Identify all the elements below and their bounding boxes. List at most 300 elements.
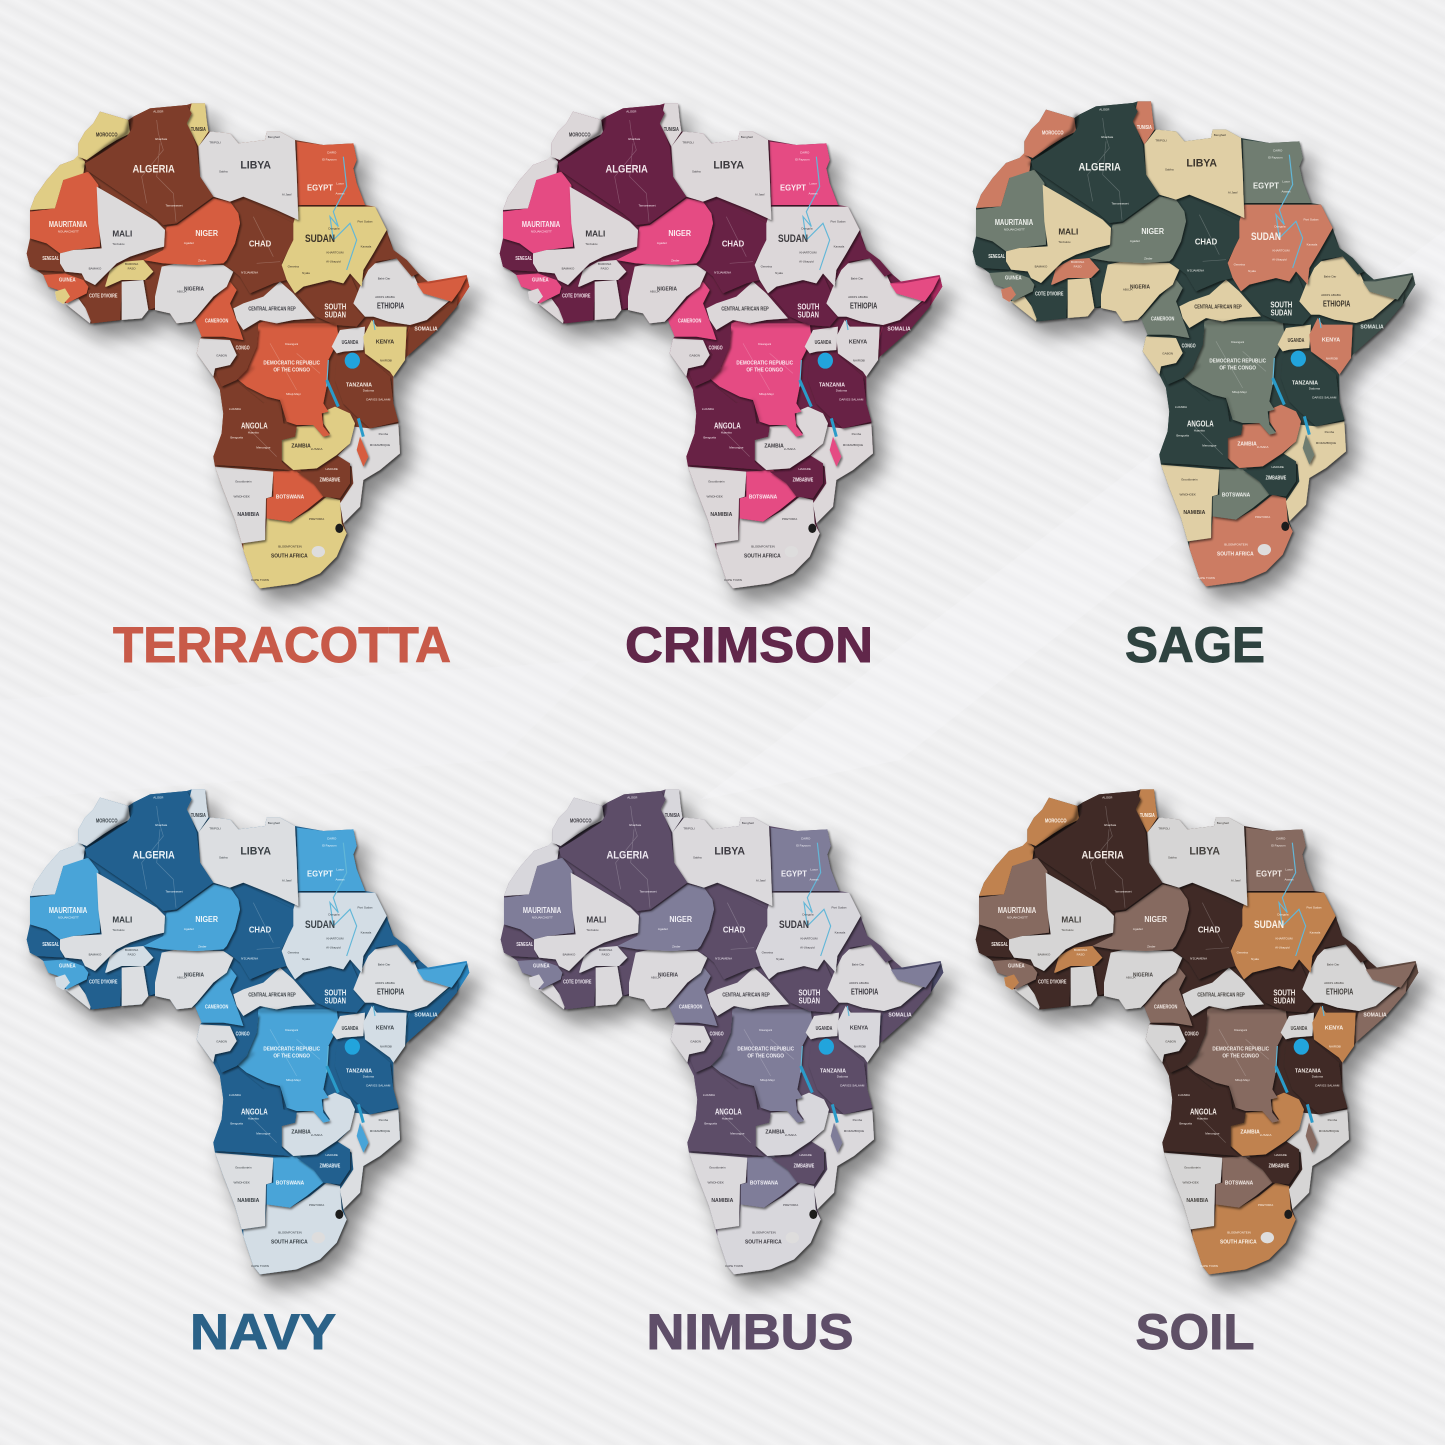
country labels: Geneina: [288, 264, 299, 268]
country labels: Benguela: [1179, 1121, 1192, 1125]
country labels: ANGOLA: [715, 1107, 742, 1116]
country labels: Tamanrasset: [165, 204, 183, 208]
country labels: SOUTH AFRICA: [744, 553, 781, 559]
country labels: N'DJAMENA: [715, 957, 732, 961]
country labels: MOROCCO: [96, 819, 117, 825]
country labels: Ghardaia: [1104, 823, 1116, 827]
country labels: ETHIOPIA: [851, 987, 878, 996]
country labels: Grootfontein: [1181, 478, 1198, 482]
country labels: CAMEROON: [1154, 1004, 1177, 1010]
country labels: SUDAN: [305, 233, 335, 245]
country labels: Pemba: [852, 432, 861, 436]
country labels: MOROCCO: [1042, 131, 1063, 137]
country labels: SENEGAL: [516, 942, 533, 948]
country labels: Al-Ubayyid: [1272, 258, 1287, 262]
country labels: El Fayoum: [322, 844, 337, 848]
country labels: Benghazi: [741, 135, 754, 139]
country labels: NOUAKCHOTT: [1004, 228, 1025, 232]
country labels: SOMALIA: [1360, 325, 1384, 331]
country shapes: [973, 101, 1415, 586]
country labels: MAURITANIA: [523, 906, 561, 915]
country labels: Benghazi: [268, 135, 281, 139]
country labels: Mbuji-Mayi: [286, 392, 301, 396]
country labels: SUDAN: [778, 233, 808, 245]
country labels: TRIPOLI: [209, 140, 221, 144]
country labels: Huambo: [1194, 428, 1205, 432]
country labels: ABUJA: [651, 976, 660, 980]
country labels: El Fayoum: [795, 158, 810, 162]
country labels: Zinder: [198, 945, 207, 949]
country labels: Ghardaia: [629, 823, 641, 827]
country labels: [42, 109, 438, 582]
country labels: Grootfontein: [1184, 1166, 1201, 1170]
country labels: ANGOLA: [1187, 419, 1214, 428]
country labels: BAMAKO: [562, 266, 575, 270]
country labels: MALI: [112, 230, 132, 239]
country labels: Luxor: [810, 867, 818, 871]
country labels: SUDAN: [1274, 996, 1295, 1005]
country labels: MALI: [586, 916, 606, 925]
country labels: DAR ES SALAAM: [366, 398, 391, 402]
country labels: TUNISIA: [191, 813, 206, 819]
country labels: Al Jawf: [756, 878, 766, 882]
country labels: Port Sudan: [358, 220, 373, 224]
country labels: Kisangani: [285, 342, 299, 346]
country labels: Grootfontein: [235, 480, 252, 484]
country shapes: [500, 103, 942, 588]
country labels: GABON: [1162, 352, 1173, 356]
country labels: ALGER: [627, 795, 638, 799]
country labels: CHAD: [722, 240, 744, 249]
country labels: Agadez: [657, 241, 668, 245]
country labels: Mbuji-Mayi: [286, 1078, 301, 1082]
country labels: TUNISIA: [664, 127, 679, 133]
country shapes: [27, 103, 469, 588]
country labels: ZAMBIA: [1240, 1130, 1260, 1136]
country labels: Dodoma: [363, 389, 374, 393]
country labels: HARARE: [1271, 465, 1284, 469]
country labels: SUDAN: [779, 919, 809, 931]
country labels: Dodoma: [837, 1075, 848, 1079]
country labels: UGANDA: [1291, 1026, 1307, 1032]
country labels: Geneina: [288, 950, 299, 954]
country labels: MOROCCO: [569, 133, 590, 139]
country labels: GUINEA: [1005, 276, 1022, 282]
country labels: CAMEROON: [205, 318, 228, 324]
country labels: KENYA: [1322, 337, 1340, 343]
country labels: BAMAKO: [89, 952, 102, 956]
country labels: SUDAN: [1271, 308, 1292, 317]
country labels: ZAMBIA: [291, 444, 311, 450]
country labels: SUDAN: [799, 996, 820, 1005]
country labels: Mbuji-Mayi: [760, 1078, 775, 1082]
title: terracotta: TERRACOTTA: [113, 617, 451, 673]
country labels: ALGERIA: [605, 164, 648, 176]
country labels: MOROCCO: [1045, 819, 1066, 825]
country labels: Benguela: [230, 1121, 243, 1125]
country labels: MAURITANIA: [995, 218, 1033, 227]
country labels: Ghardaia: [628, 137, 640, 141]
country labels: Menongue: [256, 1131, 271, 1135]
country labels: ALGERIA: [606, 850, 649, 862]
country labels: Port Sudan: [832, 906, 847, 910]
country labels: BOTSWANA: [276, 1181, 304, 1187]
country labels: PRETORIA: [782, 517, 797, 521]
country labels: WINDHOEK: [706, 494, 723, 498]
country labels: SOUTH AFRICA: [1217, 551, 1254, 557]
country labels: MOZAMBIQUE: [370, 1129, 390, 1133]
country labels: Menongue: [730, 1131, 745, 1135]
country labels: HARARE: [1274, 1153, 1287, 1157]
country labels: Al Jawf: [282, 878, 292, 882]
country labels: NAMIBIA: [710, 512, 732, 518]
country labels: Benguela: [703, 435, 716, 439]
country labels: CONGO: [236, 345, 250, 351]
country labels: DEMOCRATIC REPUBLIC: [737, 1047, 794, 1053]
country labels: NAIROBI: [1329, 1045, 1341, 1049]
country labels: GUINEA: [59, 964, 76, 970]
country labels: NOUAKCHOTT: [532, 916, 553, 920]
country labels: Geneina: [1237, 950, 1248, 954]
country labels: CHAD: [249, 240, 271, 249]
country labels: SOUTH: [798, 988, 821, 997]
country shapes: [976, 789, 1418, 1274]
country labels: Kassala: [1307, 243, 1318, 247]
country labels: SUDAN: [1254, 919, 1284, 931]
country labels: NAIROBI: [854, 1045, 866, 1049]
country labels: LIBYA: [713, 160, 744, 172]
country labels: ABUJA: [1126, 976, 1135, 980]
country labels: CHAD: [1195, 238, 1217, 247]
country labels: TANZANIA: [1295, 1068, 1321, 1074]
country labels: Kisangani: [285, 1028, 299, 1032]
country labels: Bahir Dar: [378, 276, 390, 280]
country labels: Aswan: [810, 877, 819, 881]
country labels: NAMIBIA: [1183, 510, 1205, 516]
country labels: LIBYA: [714, 846, 745, 858]
country labels: Luxor: [1285, 867, 1293, 871]
country labels: TANZANIA: [346, 382, 372, 388]
country labels: NIGERIA: [1130, 284, 1150, 290]
country labels: SENEGAL: [515, 256, 532, 262]
country labels: UGANDA: [342, 1026, 358, 1032]
country labels: DEMOCRATIC REPUBLIC: [263, 1047, 320, 1053]
country labels: UGANDA: [1288, 338, 1304, 344]
country labels: Al Jawf: [755, 192, 765, 196]
country labels: NAIROBI: [1326, 357, 1338, 361]
country labels: CENTRAL AFRICAN REP: [248, 306, 296, 312]
country labels: BOTSWANA: [1222, 493, 1250, 499]
country labels: Benguela: [704, 1121, 717, 1125]
country labels: Sabha: [693, 855, 702, 859]
country labels: Kassala: [834, 245, 845, 249]
country labels: ABUJA: [177, 976, 186, 980]
country labels: Timbuktu: [1058, 240, 1071, 244]
country labels: Tamanrasset: [639, 890, 657, 894]
country labels: FASO: [602, 952, 610, 956]
country labels: NAMIBIA: [237, 1198, 259, 1204]
country labels: Al Jawf: [282, 192, 292, 196]
country labels: NIGER: [1141, 227, 1164, 236]
country labels: MALI: [1061, 916, 1081, 925]
country labels: ADDIS ABABA: [1324, 981, 1344, 985]
country labels: SUDAN: [1251, 231, 1281, 243]
country labels: ZIMBABWE: [1269, 1164, 1290, 1170]
country labels: NIGER: [668, 229, 691, 238]
country labels: BAMAKO: [89, 266, 102, 270]
country labels: Ghardaia: [155, 823, 167, 827]
country labels: LUSAKA: [1257, 445, 1269, 449]
country labels: LUANDA: [1175, 405, 1187, 409]
country labels: Huambo: [722, 1116, 733, 1120]
country labels: Huambo: [1197, 1116, 1208, 1120]
country labels: NAMIBIA: [1186, 1198, 1208, 1204]
country labels: Pemba: [379, 432, 388, 436]
country labels: COTE D'IVOIRE: [1038, 979, 1067, 985]
country labels: Pemba: [1328, 1118, 1337, 1122]
country labels: ETHIOPIA: [850, 301, 877, 310]
country labels: CAMEROON: [1151, 316, 1174, 322]
country labels: Bahir Dar: [1324, 274, 1336, 278]
country labels: Menongue: [729, 445, 744, 449]
country labels: LIBYA: [1186, 158, 1217, 170]
country labels: Kisangani: [1234, 1028, 1248, 1032]
country labels: Bahir Dar: [851, 276, 863, 280]
country labels: Nyala: [302, 271, 310, 275]
country labels: FASO: [128, 952, 136, 956]
title: sage: SAGE: [1125, 617, 1265, 673]
country labels: ALGER: [626, 109, 637, 113]
country labels: Kassala: [1310, 931, 1321, 935]
country labels: SENEGAL: [988, 254, 1005, 260]
country labels: Timbuktu: [1061, 928, 1074, 932]
country labels: LUSAKA: [1260, 1133, 1272, 1137]
country labels: TANZANIA: [1292, 380, 1318, 386]
country labels: Dodoma: [1309, 387, 1320, 391]
country labels: Port Sudan: [358, 906, 373, 910]
country labels: El Fayoum: [322, 158, 337, 162]
country labels: Agadez: [184, 241, 195, 245]
country labels: Aswan: [1285, 877, 1294, 881]
country labels: Al-Ubayyid: [799, 260, 814, 264]
country labels: MOZAMBIQUE: [1319, 1129, 1339, 1133]
country labels: Zinder: [198, 259, 207, 263]
country labels: NIGER: [1144, 915, 1167, 924]
country labels: CAPE TOWN: [1197, 576, 1215, 580]
country labels: Aswan: [336, 191, 345, 195]
country labels: Bahir Dar: [852, 962, 864, 966]
country labels: CENTRAL AFRICAN REP: [721, 306, 769, 312]
country labels: SUDAN: [798, 310, 819, 319]
country labels: Pemba: [1325, 430, 1334, 434]
country labels: Nyala: [302, 957, 310, 961]
country labels: SOMALIA: [887, 327, 911, 333]
country labels: SOUTH AFRICA: [1220, 1239, 1257, 1245]
country labels: CONGO: [710, 1031, 724, 1037]
country labels: GABON: [1165, 1040, 1176, 1044]
country labels: ZIMBABWE: [320, 478, 341, 484]
country labels: CAIRO: [1276, 836, 1286, 840]
country labels: Port Sudan: [831, 220, 846, 224]
country labels: Bahir Dar: [1327, 962, 1339, 966]
country labels: Mbuji-Mayi: [759, 392, 774, 396]
country labels: BLOEMFONTEIN: [752, 1230, 776, 1234]
country labels: OF THE CONGO: [273, 1054, 310, 1060]
country labels: LUANDA: [229, 1093, 241, 1097]
country labels: TUNISIA: [1137, 125, 1152, 131]
country labels: LUSAKA: [311, 447, 323, 451]
country labels: MAURITANIA: [998, 906, 1036, 915]
country labels: Sabha: [1165, 167, 1174, 171]
country labels: ETHIOPIA: [377, 301, 404, 310]
country labels: BURKINA: [1071, 260, 1084, 264]
country labels: NAIROBI: [380, 1045, 392, 1049]
country labels: CENTRAL AFRICAN REP: [722, 992, 770, 998]
country labels: CHAD: [1198, 926, 1220, 935]
country labels: SOUTH: [324, 988, 347, 997]
country labels: SENEGAL: [42, 942, 59, 948]
country labels: BURKINA: [125, 262, 138, 266]
country shapes: [501, 789, 943, 1274]
title: soil: SOIL: [1136, 1304, 1254, 1360]
country labels: Geneina: [761, 264, 772, 268]
country labels: Port Sudan: [1304, 218, 1319, 222]
country labels: Tamanrasset: [1111, 202, 1129, 206]
country labels: Al-Ubayyid: [1275, 946, 1290, 950]
country labels: ZAMBIA: [764, 444, 784, 450]
country labels: BOTSWANA: [1225, 1181, 1253, 1187]
country labels: CAMEROON: [679, 1004, 702, 1010]
country labels: BAMAKO: [1035, 264, 1048, 268]
country labels: KHARTOUM: [327, 936, 344, 940]
country labels: SOMALIA: [414, 1013, 438, 1019]
country labels: El Fayoum: [1271, 844, 1286, 848]
country labels: CONGO: [709, 345, 723, 351]
country labels: CAIRO: [327, 836, 337, 840]
country labels: EGYPT: [1253, 182, 1279, 191]
country labels: Menongue: [256, 445, 271, 449]
country labels: Nyala: [775, 271, 783, 275]
country labels: SOUTH: [797, 302, 820, 311]
map: soil: [976, 789, 1418, 1274]
country labels: LUANDA: [229, 407, 241, 411]
country labels: WINDHOEK: [1179, 492, 1196, 496]
country labels: Tamanrasset: [165, 890, 183, 894]
country labels: UGANDA: [816, 1026, 832, 1032]
country labels: TRIPOLI: [1158, 826, 1170, 830]
map: sage: [973, 101, 1415, 586]
country labels: El Fayoum: [1268, 156, 1283, 160]
title: nimbus: NIMBUS: [646, 1304, 854, 1360]
country labels: BLOEMFONTEIN: [1224, 542, 1248, 546]
country labels: Menongue: [1202, 443, 1217, 447]
country labels: BLOEMFONTEIN: [751, 544, 775, 548]
country labels: EGYPT: [780, 184, 806, 193]
country labels: HARARE: [798, 467, 811, 471]
country labels: Dongola: [801, 226, 813, 230]
country labels: PRETORIA: [783, 1203, 798, 1207]
country labels: ALGER: [153, 109, 164, 113]
country labels: CAIRO: [327, 150, 337, 154]
country labels: El Fayoum: [796, 844, 811, 848]
country labels: Kassala: [835, 931, 846, 935]
country labels: KHARTOUM: [327, 250, 344, 254]
country labels: COTE D'IVOIRE: [1035, 291, 1064, 297]
country labels: ANGOLA: [1190, 1107, 1217, 1116]
country labels: MAURITANIA: [522, 220, 560, 229]
country labels: SOUTH: [1273, 988, 1296, 997]
country labels: ETHIOPIA: [1326, 987, 1353, 996]
country labels: ALGERIA: [1081, 850, 1124, 862]
country labels: SOMALIA: [414, 327, 438, 333]
country labels: HARARE: [325, 467, 338, 471]
country labels: Zinder: [1144, 257, 1153, 261]
country labels: FASO: [1077, 952, 1085, 956]
country labels: SOUTH AFRICA: [745, 1239, 782, 1245]
country labels: BURKINA: [598, 262, 611, 266]
country labels: Al Jawf: [1228, 190, 1238, 194]
country labels: LIBYA: [240, 846, 271, 858]
country labels: N'DJAMENA: [241, 957, 258, 961]
country labels: Kassala: [361, 245, 372, 249]
country labels: N'DJAMENA: [1190, 957, 1207, 961]
country labels: OF THE CONGO: [1219, 366, 1256, 372]
country labels: CAIRO: [801, 836, 811, 840]
country labels: COTE D'IVOIRE: [89, 293, 118, 299]
country labels: Ghardaia: [155, 137, 167, 141]
country labels: LUSAKA: [784, 447, 796, 451]
country labels: DAR ES SALAAM: [840, 1084, 865, 1088]
country labels: ANGOLA: [714, 421, 741, 430]
country labels: LIBYA: [1189, 846, 1220, 858]
country labels: CAIRO: [1273, 148, 1283, 152]
country labels: GUINEA: [532, 278, 549, 284]
country labels: Port Sudan: [1307, 906, 1322, 910]
country labels: DEMOCRATIC REPUBLIC: [263, 361, 320, 367]
country labels: CAPE TOWN: [725, 1264, 743, 1268]
country labels: EGYPT: [307, 184, 333, 193]
country labels: Menongue: [1205, 1131, 1220, 1135]
country labels: KENYA: [850, 1025, 868, 1031]
country labels: Al Jawf: [1231, 878, 1241, 882]
country labels: OF THE CONGO: [746, 368, 783, 374]
country labels: Al-Ubayyid: [326, 946, 341, 950]
country labels: Ghardaia: [1101, 135, 1113, 139]
country labels: DEMOCRATIC REPUBLIC: [1212, 1047, 1269, 1053]
country shapes: [27, 789, 469, 1274]
country labels: HARARE: [799, 1153, 812, 1157]
country labels: KHARTOUM: [1273, 248, 1290, 252]
country labels: Bahir Dar: [378, 962, 390, 966]
country labels: Zinder: [1147, 945, 1156, 949]
country labels: ALGER: [1099, 107, 1110, 111]
country labels: Huambo: [721, 430, 732, 434]
country labels: Dodoma: [363, 1075, 374, 1079]
country labels: COTE D'IVOIRE: [563, 979, 592, 985]
country labels: ZAMBIA: [291, 1130, 311, 1136]
country labels: BLOEMFONTEIN: [1227, 1230, 1251, 1234]
country labels: MAURITANIA: [49, 906, 87, 915]
country labels: TUNISIA: [191, 127, 206, 133]
country labels: CENTRAL AFRICAN REP: [248, 992, 296, 998]
country labels: BURKINA: [125, 948, 138, 952]
country labels: TANZANIA: [820, 1068, 846, 1074]
country labels: GABON: [689, 354, 700, 358]
country labels: WINDHOEK: [707, 1180, 724, 1184]
country labels: Dodoma: [836, 389, 847, 393]
country labels: Dongola: [802, 912, 814, 916]
country labels: CHAD: [249, 926, 271, 935]
